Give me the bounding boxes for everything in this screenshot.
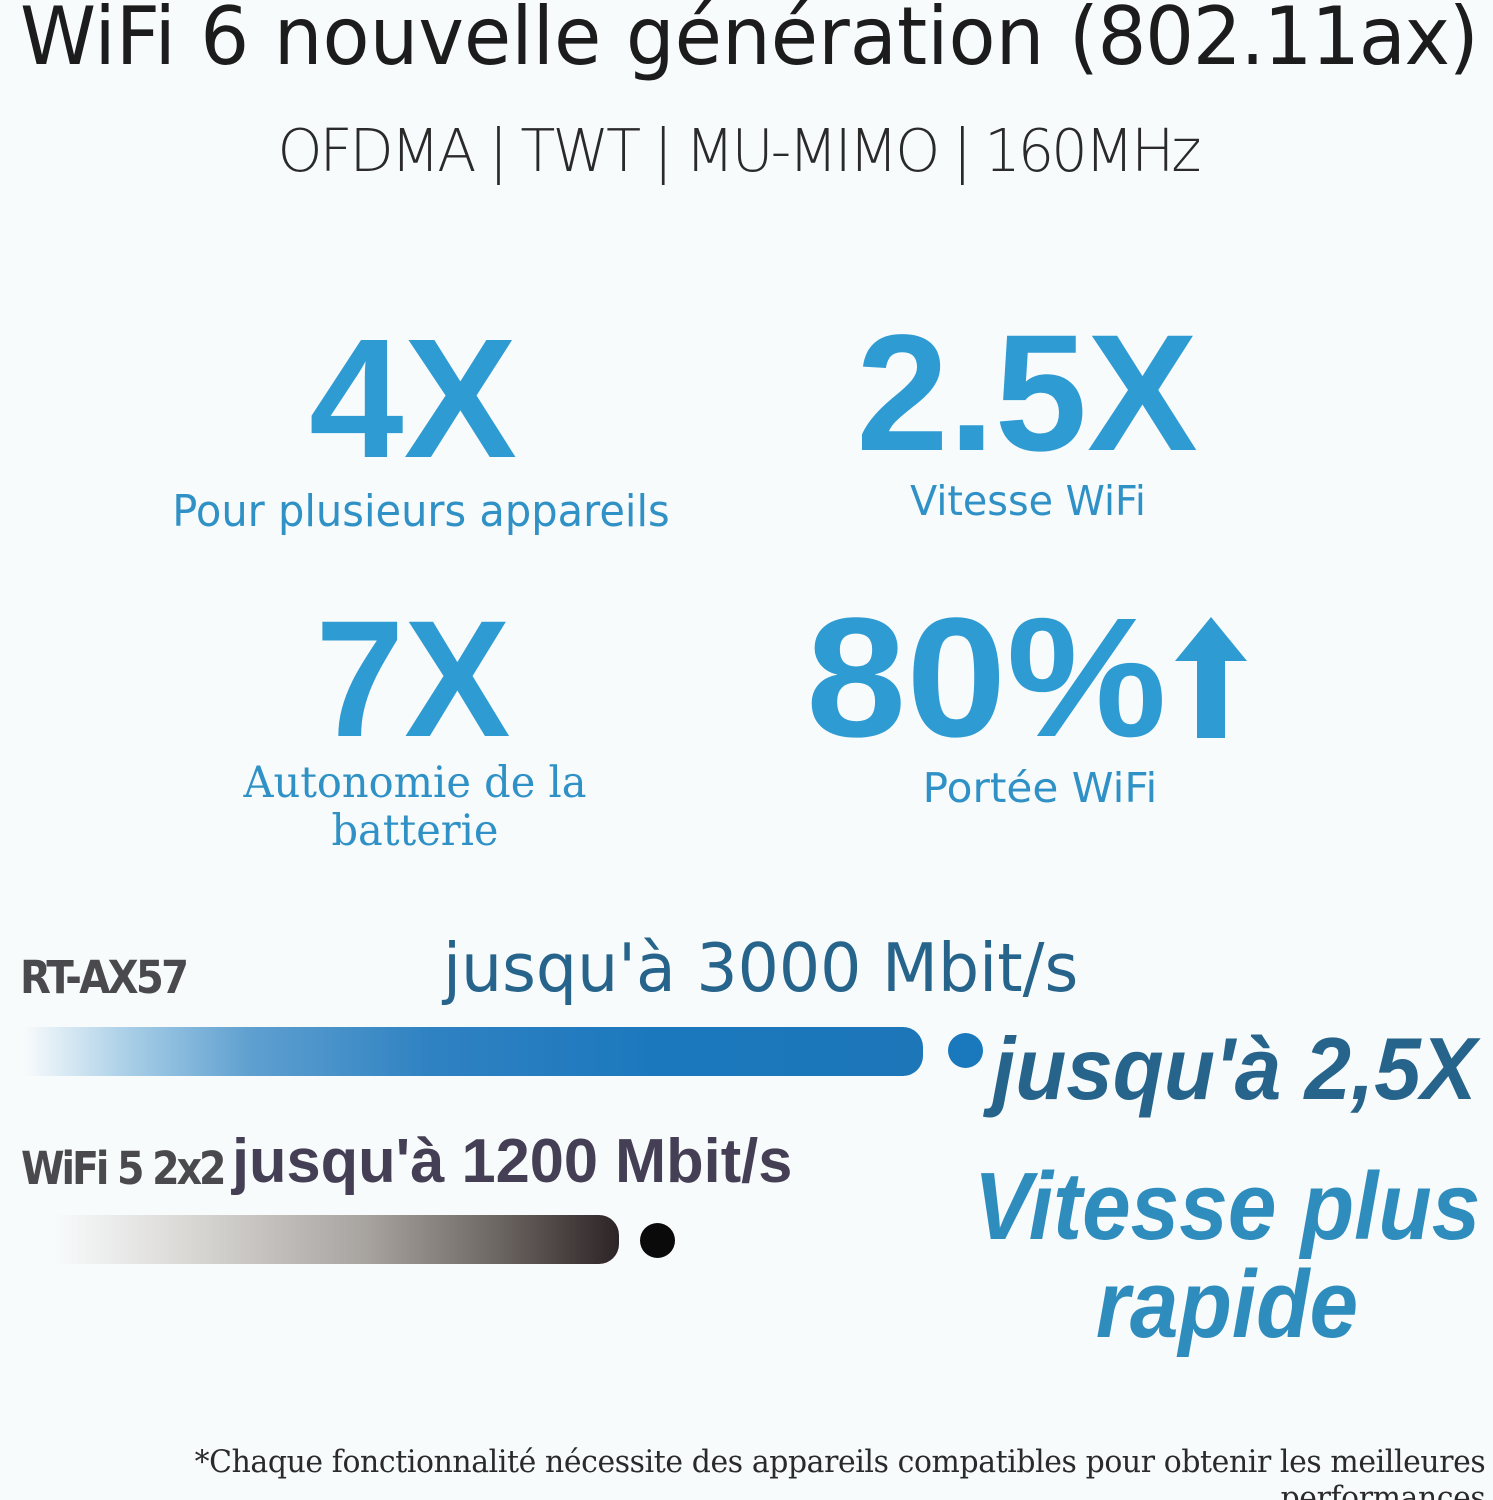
callout: faster speed: Vitesse plus (974, 1153, 1480, 1260)
label: WiFi 5 2x2: WiFi 5 2x2 (21, 1142, 223, 1195)
label: 7X: batterie (331, 806, 499, 856)
label: 2.5X: Vitesse WiFi (910, 477, 1146, 525)
footnote (194, 1444, 1485, 1500)
bar: RT-AX57 (24, 1027, 923, 1076)
label: RT-AX57: RT-AX57 (20, 951, 186, 1004)
icon: up arrow (1175, 617, 1247, 738)
footnote: *Chaque fonctionnalité nécessite des appareils compatibles pour obtenir les meilleures (194, 1444, 1485, 1480)
label: 7X: Autonomie de la (243, 758, 587, 808)
label: 80%: Portée WiFi (923, 764, 1157, 812)
dot: blue (948, 1033, 983, 1068)
callout: up to 2.5X: jusqu'à 2,5X (992, 1019, 1476, 1118)
callout: faster speed: rapide (1096, 1251, 1358, 1358)
dot: black (640, 1223, 675, 1258)
stat: 7X: 7X (316, 587, 510, 772)
speed: 1200 Mbit/s: jusqu'à 1200 Mbit/s (232, 1127, 792, 1196)
stat: 4X: 4X (309, 304, 517, 494)
label: 7X (243, 758, 587, 856)
subtitle: OFDMA | TWT | MU-MIMO | 160MHz (277, 116, 1199, 185)
speed: 3000 Mbit/s: jusqu'à 3000 Mbit/s (443, 929, 1078, 1007)
stat: 80%: 80% (806, 583, 1167, 773)
callout: faster speed (974, 1153, 1480, 1358)
label: 4X: Pour plusieurs appareils (172, 486, 670, 537)
stat: 2.5X: 2.5X (856, 301, 1198, 486)
bar: WiFi 5 (54, 1215, 619, 1264)
